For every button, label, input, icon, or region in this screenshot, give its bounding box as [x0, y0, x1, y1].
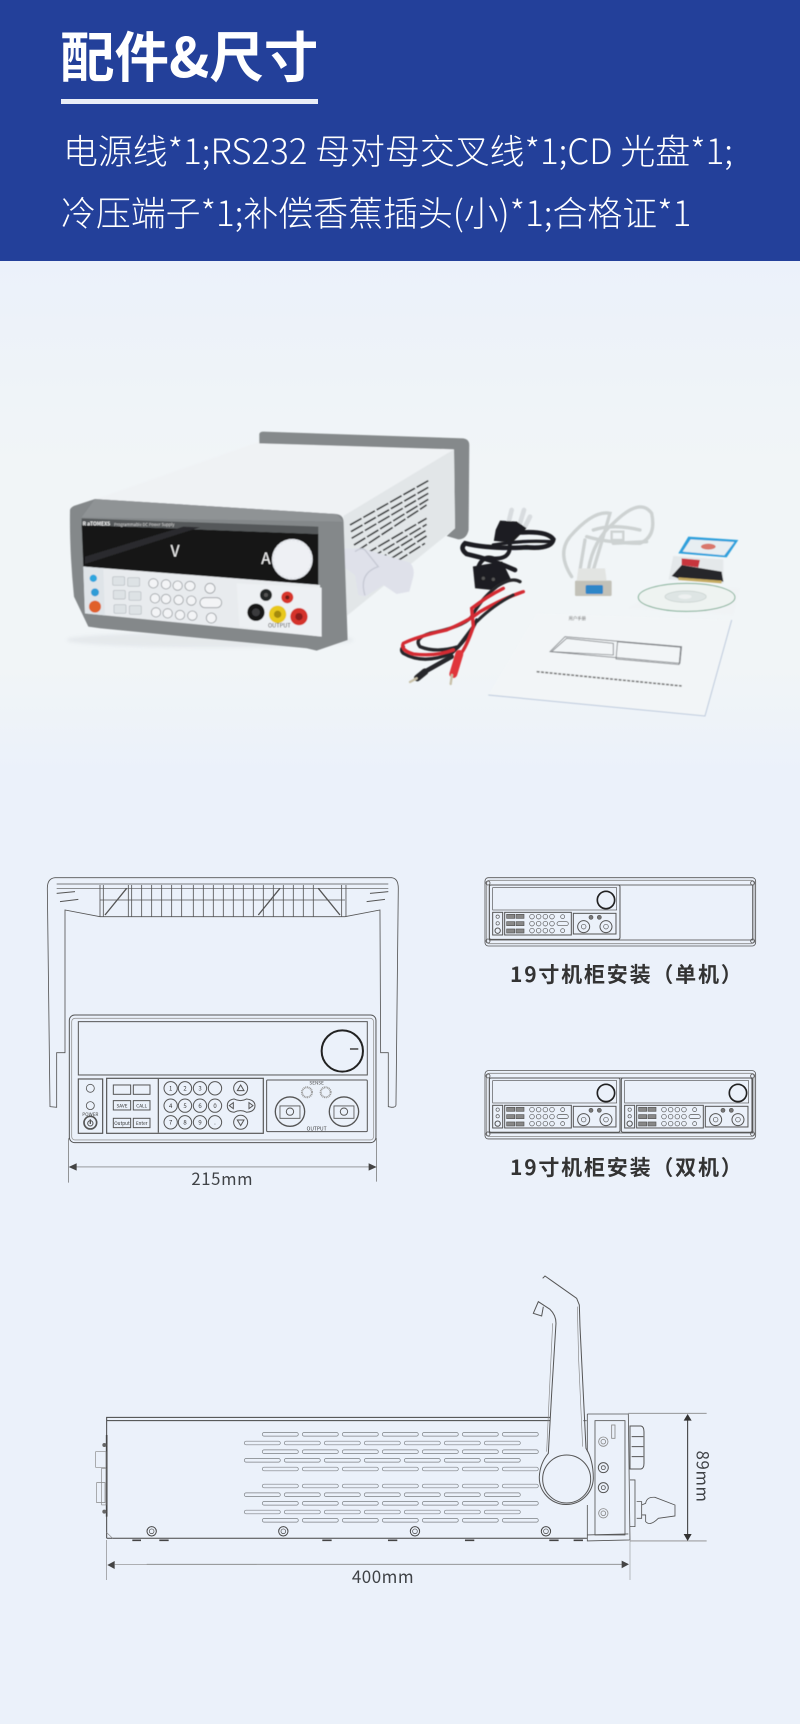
panel side	[583, 1414, 630, 1541]
screws	[147, 1527, 551, 1536]
dial profile	[630, 1426, 644, 1469]
rack mount double	[485, 1071, 756, 1139]
power supply device	[67, 432, 469, 651]
brand label: R aTOMEXS	[83, 521, 110, 528]
sense and output terminals	[247, 589, 308, 625]
serial connector	[575, 568, 612, 596]
side panel	[343, 449, 455, 617]
photo backdrop	[0, 261, 800, 771]
vent slots	[244, 1432, 538, 1522]
key digits: 7	[169, 1118, 173, 1127]
accessory list: 电源线*1;RS232 母对母交叉线*1;CD 光盘*1;	[63, 125, 733, 175]
key digits: 4	[169, 1101, 173, 1110]
key labels: Output	[114, 1121, 130, 1127]
key digits: 3	[198, 1084, 202, 1093]
arrow keys	[227, 1081, 255, 1129]
depth dimension	[147, 1540, 630, 1580]
dial	[322, 1030, 363, 1072]
key digits: 5	[183, 1101, 187, 1110]
width dimension	[69, 1138, 377, 1183]
key digits: 0	[213, 1101, 217, 1110]
key labels: Enter	[136, 1121, 148, 1127]
key digits: 9	[198, 1118, 202, 1127]
V label: V	[171, 540, 180, 562]
accessories	[402, 507, 740, 716]
display window	[78, 1022, 367, 1075]
215mm label: 215mm	[191, 1166, 253, 1190]
control panel	[83, 567, 322, 637]
serial cable	[564, 507, 653, 577]
SENSE label: SENSE	[309, 1080, 324, 1086]
double rack caption: 19寸机柜安装（双机）	[510, 1152, 744, 1182]
depth left arrow	[107, 1540, 257, 1580]
top cover	[93, 442, 455, 517]
A label: A	[261, 547, 271, 569]
key digits: 6	[198, 1101, 202, 1110]
key digits: .	[214, 1118, 216, 1127]
CD disc	[638, 583, 735, 611]
feet	[132, 1538, 583, 1543]
model label: Programmable DC Power Supply	[114, 522, 175, 528]
front view drawing	[47, 878, 398, 1190]
display window	[82, 525, 318, 585]
OUTPUT label: OUTPUT	[268, 621, 291, 630]
power cord	[463, 510, 553, 589]
function keys	[113, 577, 141, 614]
rack mount single	[485, 878, 756, 946]
output terminal panel	[237, 583, 322, 637]
device shadow	[67, 633, 353, 647]
side view drawing	[96, 1276, 716, 1588]
accessory list: 冷压端子*1;补偿香蕉插头(小)*1;合格证*1	[61, 187, 691, 237]
terminal bag	[669, 556, 723, 583]
output terminals	[267, 1080, 367, 1132]
header band	[0, 0, 800, 261]
89mm label: 89mm	[692, 1451, 716, 1503]
400mm label: 400mm	[352, 1563, 414, 1588]
single rack caption: 19寸机柜安装（单机）	[510, 959, 744, 989]
OUTPUT label: OUTPUT	[307, 1125, 327, 1132]
key labels: CALL	[136, 1103, 148, 1109]
rack frame	[485, 1071, 756, 1139]
mounted unit	[489, 885, 620, 939]
height dimension	[628, 1413, 707, 1541]
rear handle	[259, 432, 469, 539]
test leads	[402, 580, 523, 684]
right unit	[621, 1078, 752, 1132]
knob	[272, 539, 313, 580]
side vents	[350, 481, 428, 570]
front section	[147, 1276, 716, 1580]
carry handle	[343, 548, 414, 597]
rack frame	[485, 878, 756, 946]
blue LEDs and power button	[89, 575, 101, 613]
certificate card	[678, 537, 738, 557]
left unit	[489, 1078, 620, 1132]
function keys	[107, 1078, 263, 1133]
title: 配件&尺寸	[60, 14, 318, 93]
product photo	[67, 432, 740, 716]
number keys	[149, 579, 222, 623]
key digits: 1	[169, 1084, 172, 1093]
manual heading: 用户手册	[569, 615, 587, 622]
front panel	[69, 1015, 376, 1143]
manual line drawing	[550, 637, 682, 665]
chassis body	[96, 1417, 587, 1540]
title underline	[61, 99, 318, 104]
rack handle	[47, 878, 398, 1107]
rack ear handle	[533, 1276, 593, 1504]
key digits: 8	[183, 1118, 187, 1127]
banana plug	[630, 1480, 675, 1527]
manual	[488, 613, 732, 716]
CD sleeve	[628, 586, 740, 615]
key labels: SAVE	[117, 1103, 128, 1109]
number keys	[164, 1082, 222, 1129]
indicators and power switch	[78, 1079, 103, 1133]
POWER label: POWER	[82, 1112, 98, 1118]
key digits: 2	[183, 1084, 187, 1093]
front bezel	[70, 499, 348, 651]
